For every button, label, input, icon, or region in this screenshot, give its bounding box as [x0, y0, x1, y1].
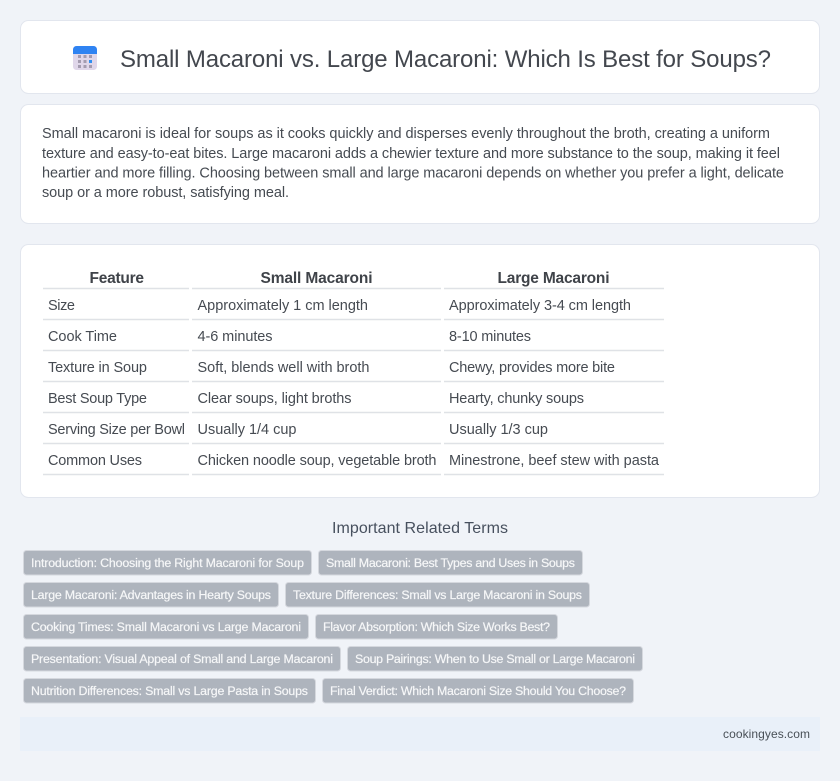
- row: size: Approximately 1 cm length: [198, 298, 368, 314]
- tag: [286, 582, 590, 607]
- panel: comparison table: [20, 244, 820, 498]
- row: serving size: Serving Size per Bowl: [48, 422, 185, 438]
- tag list: related terms: [24, 550, 642, 703]
- row: common uses: [48, 453, 660, 469]
- panel: introduction: [20, 104, 820, 224]
- table header: [90, 270, 610, 287]
- row: size: [48, 298, 631, 314]
- row: best soup type: Clear soups, light broths: [198, 391, 352, 407]
- row: cook time: Cook Time: [48, 329, 117, 345]
- tag: Small Macaroni: Best Types and Uses in Soups: [326, 556, 575, 570]
- row: size: Size: [48, 298, 75, 314]
- intro text: soup or a more robust, satisfying meal.: [42, 185, 289, 201]
- row: serving size: [48, 422, 548, 438]
- row: texture: Chewy, provides more bite: [449, 360, 615, 376]
- intro text: heartier and more filling. Choosing between small and large macaroni depends on whether you prefer a light, delicate: [42, 166, 784, 182]
- tag: Cooking Times: Small Macaroni vs Large Macaroni: [31, 620, 301, 634]
- tag: [318, 550, 582, 575]
- tag: [24, 646, 340, 671]
- tag: Texture Differences: Small vs Large Macaroni in Soups: [293, 588, 582, 602]
- row: serving size: Usually 1/4 cup: [198, 422, 296, 438]
- tag: Soup Pairings: When to Use Small or Large Macaroni: [355, 652, 635, 666]
- row: best soup type: Hearty, chunky soups: [449, 391, 584, 407]
- row: best soup type: [48, 391, 584, 407]
- table header: Feature: [90, 270, 144, 287]
- tag: [24, 678, 316, 703]
- row: best soup type: Best Soup Type: [48, 391, 147, 407]
- row: common uses: Chicken noodle soup, vegetable broth: [198, 453, 436, 469]
- table header: Large Macaroni: [498, 270, 610, 287]
- tag: Nutrition Differences: Small vs Large Pasta in Soups: [31, 684, 308, 698]
- panel: title header: [20, 20, 820, 94]
- row: size: Approximately 3-4 cm length: [449, 298, 631, 314]
- tag: [24, 582, 278, 607]
- row: texture: Soft, blends well with broth: [198, 360, 370, 376]
- row: cook time: 4-6 minutes: [198, 329, 272, 345]
- title: Small Macaroni vs. Large Macaroni: Which Is Best for Soups?: [120, 46, 771, 73]
- tag: [24, 550, 312, 575]
- tag: [24, 614, 308, 639]
- tag: Large Macaroni: Advantages in Hearty Soups: [31, 588, 271, 602]
- row: cook time: [48, 329, 531, 345]
- row: serving size: Usually 1/3 cup: [449, 422, 548, 438]
- tag: [316, 614, 558, 639]
- tag: Final Verdict: Which Macaroni Size Should You Choose?: [330, 684, 626, 698]
- row: texture: Texture in Soup: [48, 360, 147, 376]
- tag: [322, 678, 634, 703]
- heading: related terms: Important Related Terms: [332, 520, 508, 537]
- intro text: texture and easy-to-eat bites. Large macaroni adds a chewier texture and more substance to the soup, making it feel: [42, 146, 780, 162]
- table header: Small Macaroni: [260, 270, 372, 287]
- footer source text: cookingyes.com: [723, 727, 810, 741]
- row: cook time: 8-10 minutes: [449, 329, 531, 345]
- intro text: [42, 126, 784, 201]
- tag: [348, 646, 642, 671]
- row: common uses: Common Uses: [48, 453, 142, 469]
- tag: Presentation: Visual Appeal of Small and Large Macaroni: [31, 652, 333, 666]
- icon: calendar: [73, 46, 97, 70]
- row: texture: [48, 360, 615, 376]
- tag: Introduction: Choosing the Right Macaroni for Soup: [31, 556, 304, 570]
- tag: Flavor Absorption: Which Size Works Best?: [323, 620, 550, 634]
- intro text: Small macaroni is ideal for soups as it cooks quickly and disperses evenly throughout the broth, creating a uniform: [42, 126, 770, 142]
- row: common uses: Minestrone, beef stew with pasta: [449, 453, 660, 469]
- footer: [20, 717, 820, 751]
